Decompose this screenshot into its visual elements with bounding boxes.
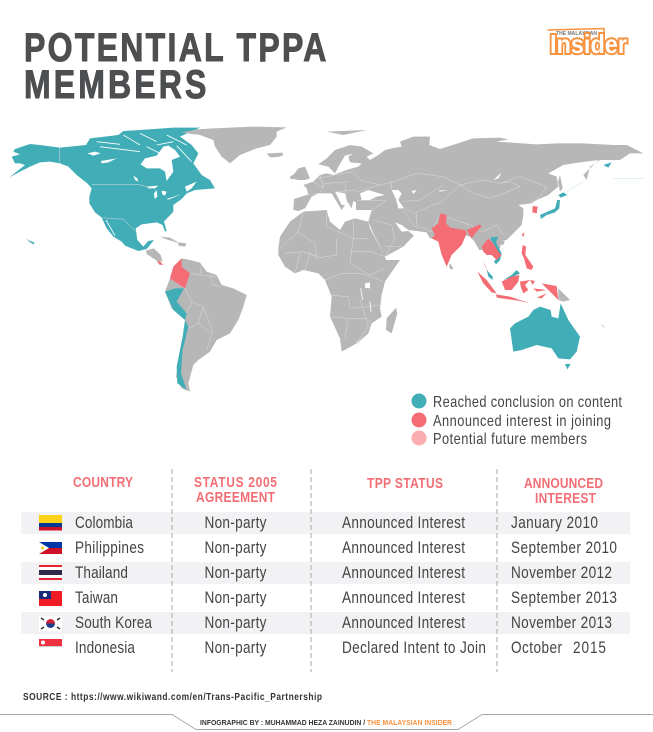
table rows: Non-party [204,639,267,657]
title [24,25,326,107]
table rows: October [511,639,562,657]
table rows: Non-party [204,614,267,632]
title: MEMBERS [24,62,206,107]
table rows: Non-party [204,514,267,532]
region: Africa [278,210,400,352]
table rows: Announced Interest [342,514,466,532]
table rows: January 2010 [511,514,598,532]
table headers [73,474,603,506]
flag: Colombia [39,515,62,530]
table rows: Non-party [204,539,267,557]
flag: South Korea [39,616,62,631]
table rows: November 2013 [511,614,612,632]
flag: Singapore [39,639,62,647]
table rows: September 2013 [511,589,617,607]
table rows: Announced Interest [342,539,466,557]
table headers: TPP STATUS [367,475,443,491]
region: Australia [510,303,606,369]
region: Japan and Kamchatka [540,162,643,219]
logo: The Malaysian Insider: THE MALAYSIAN [556,31,597,37]
table rows: Declared Intent to Join [342,639,486,657]
flag: Taiwan [39,591,62,606]
region: Southeast Asia [432,206,570,303]
table rows: Thailand [75,564,128,582]
table rows [75,514,617,657]
legend [412,394,622,448]
table rows: November 2012 [511,564,612,582]
region: Greenland, Iceland, Caribbean, South America [146,127,287,392]
table rows: Announced Interest [342,589,466,607]
table row bands [21,512,630,634]
table rows: Announced Interest [342,614,466,632]
legend: Reached conclusion on content [433,394,622,411]
logo: The Malaysian Insider: Insider [550,29,627,59]
table headers: STATUS 2005 [194,474,277,490]
table rows: 2015 [573,639,606,657]
table rows: Colombia [75,514,133,532]
table headers: ANNOUNCED [524,475,603,491]
legend: Announced interest in joining [433,413,611,430]
title: POTENTIAL TPPA [24,25,326,70]
world map [9,127,643,392]
flag: Philippines [39,542,62,554]
table rows: Taiwan [75,589,118,607]
footer credit: INFOGRAPHIC BY : MUHAMMAD HEZA ZAINUDIN / THE MALAYSIAN INSIDER [200,720,452,727]
table headers: INTEREST [535,490,597,506]
region: Eurasia [270,130,643,257]
table rows: September 2010 [511,539,617,557]
table rows: South Korea [75,614,152,632]
table rows: Announced Interest [342,564,466,582]
table headers: COUNTRY [73,474,133,490]
legend: Potential future members [433,431,587,448]
flag: Thailand [39,565,62,580]
table rows: Non-party [204,589,267,607]
table headers: AGREEMENT [196,489,276,505]
source: SOURCE : https://www.wikiwand.com/en/Trans-Pacific_Partnership [23,691,322,703]
table rows: Non-party [204,564,267,582]
table rows: Philippines [75,539,144,557]
region: North America [9,128,215,251]
table rows: Indonesia [75,639,135,657]
